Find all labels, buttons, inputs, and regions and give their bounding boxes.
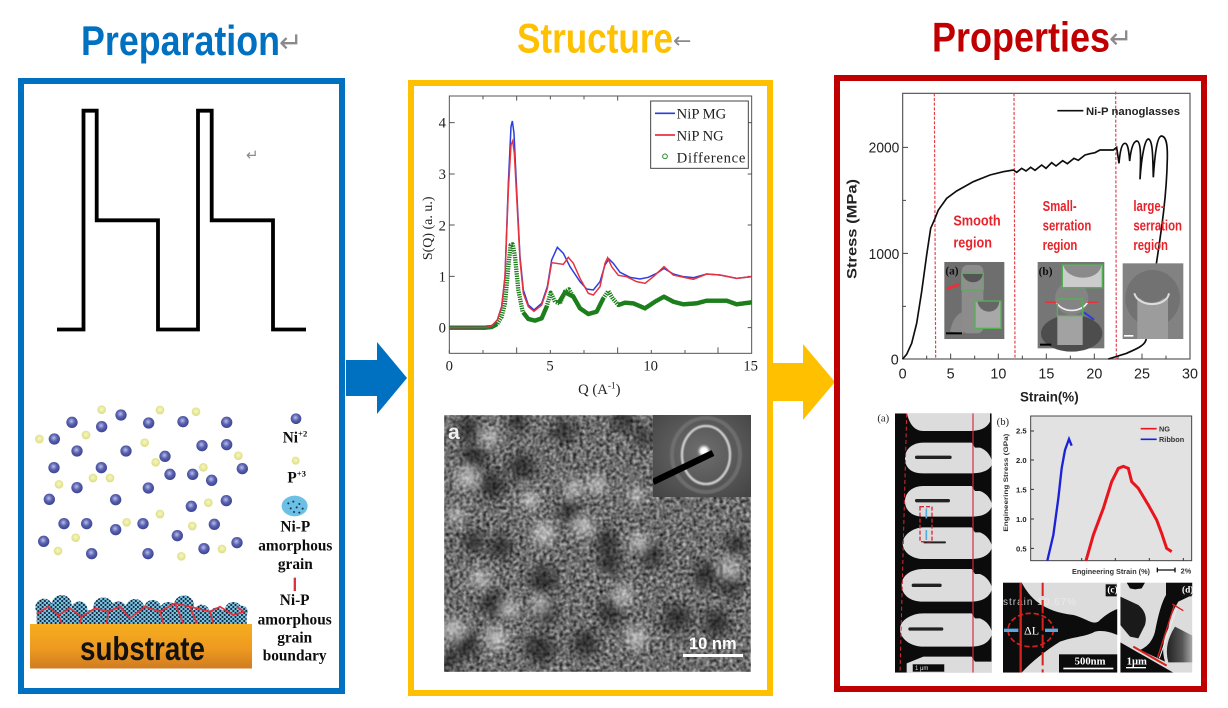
SEM inset b <box>1038 262 1104 352</box>
NG vs ribbon stress chart: NG <box>1159 424 1170 433</box>
stress-strain chart: 0 <box>891 352 899 368</box>
TEM micrograph <box>441 409 751 672</box>
TEM image d: 1μm <box>1127 656 1147 667</box>
legend: Ni-P <box>280 592 310 609</box>
region labels: region <box>1133 238 1168 254</box>
title: Properties: Properties <box>932 14 1110 60</box>
S(Q) line chart: Q (A <box>578 382 608 398</box>
S(Q) line chart: -1 <box>608 382 616 392</box>
S(Q) line chart: 2 <box>439 218 446 234</box>
legend: +2 <box>298 428 307 438</box>
atoms diagram <box>35 405 248 561</box>
substrate block <box>30 624 252 668</box>
in-situ TEM strip <box>895 412 992 673</box>
stray return mark: ↵ <box>246 146 259 164</box>
NG vs ribbon stress chart <box>1003 416 1192 576</box>
NG vs ribbon stress chart: 2.5 <box>1016 427 1027 436</box>
NG vs ribbon stress chart: 1.5 <box>1016 485 1027 494</box>
NG vs ribbon stress chart: 1.0 <box>1016 515 1027 524</box>
in-situ TEM strip: 1 μm <box>915 666 928 672</box>
legend: +3 <box>297 469 307 479</box>
arrow: structure to properties <box>772 344 835 420</box>
panel letter a: a <box>448 421 460 444</box>
SEM inset a: (a) <box>945 265 959 277</box>
SEM inset c <box>1123 263 1183 339</box>
arrow: preparation to structure <box>346 342 407 414</box>
scale bar 10 nm <box>683 635 743 657</box>
region labels: Small- <box>1043 199 1077 215</box>
S(Q) line chart: 3 <box>439 167 446 183</box>
NG vs ribbon stress chart: Engineering Stress (GPa) <box>1003 434 1010 532</box>
stress-strain chart: 25 <box>1134 366 1150 382</box>
NG vs ribbon stress chart: 0.5 <box>1016 544 1027 553</box>
bottom figures <box>877 412 1193 673</box>
chart legend: NiP MG <box>677 107 727 123</box>
stress-strain chart: 2000 <box>869 141 899 157</box>
title: Properties: ↵ <box>1109 22 1132 55</box>
SEM inset b: (b) <box>1039 266 1053 278</box>
chart legend: Difference <box>677 150 745 166</box>
title: Preparation: ↵ <box>279 26 302 59</box>
region labels: region <box>953 235 992 251</box>
S(Q) line chart: 4 <box>439 116 447 132</box>
difference curve <box>449 244 752 328</box>
TEM image c: 500nm <box>1075 656 1106 667</box>
MG curve <box>449 121 752 328</box>
label a: (a) <box>877 414 890 425</box>
panel: properties <box>837 78 1204 689</box>
curve legend: Ni-P nanoglasses <box>1086 106 1180 118</box>
substrate block: substrate <box>80 630 205 667</box>
region labels: serration <box>1133 219 1182 235</box>
chart legend <box>651 101 748 168</box>
stress-strain chart: 1000 <box>869 247 899 263</box>
legend: P <box>287 470 297 487</box>
scale bar 10 nm: 10 nm <box>689 635 737 653</box>
S(Q) line chart: 0 <box>439 321 446 337</box>
stress-strain chart: 10 <box>990 366 1006 382</box>
TEM image d: (d) <box>1182 585 1193 596</box>
stress-strain chart: 0 <box>899 366 907 382</box>
S(Q) line chart <box>421 96 758 398</box>
S(Q) line chart: 1 <box>439 270 446 286</box>
region labels: serration <box>1043 219 1091 235</box>
diffraction inset <box>653 415 751 497</box>
S(Q) line chart: 5 <box>546 359 554 375</box>
title: Structure: ← <box>673 29 691 54</box>
NG vs ribbon stress chart: 2% <box>1181 566 1192 575</box>
region labels: region <box>1043 238 1077 254</box>
stress-strain chart: 15 <box>1038 366 1054 382</box>
pulse waveform chart <box>57 111 306 330</box>
stress curve <box>903 136 1167 359</box>
legend <box>258 413 332 665</box>
TEM image c: (c) <box>1107 585 1118 596</box>
TEM image c: ΔL <box>1024 623 1039 637</box>
stress-strain chart: 5 <box>947 366 955 382</box>
S(Q) line chart: S(Q) (a. u.) <box>421 196 436 260</box>
S(Q) line chart: ) <box>616 382 621 398</box>
NG curve <box>449 141 752 328</box>
title: Preparation: Preparation <box>81 17 280 64</box>
TEM image c: strain 10.67% <box>1003 597 1077 608</box>
S(Q) line chart: 0 <box>446 359 453 375</box>
panel: structure <box>411 83 770 693</box>
chart legend: NiP NG <box>677 128 724 144</box>
legend: grain <box>278 556 313 573</box>
NG vs ribbon stress chart: Engineering Strain (%) <box>1072 567 1151 576</box>
region labels <box>953 199 1182 254</box>
legend: amorphous <box>258 538 332 555</box>
title: Structure: Structure <box>517 14 673 62</box>
S(Q) line chart: 15 <box>743 359 758 375</box>
TEM image d <box>1120 583 1193 673</box>
region labels: Smooth <box>953 214 1001 230</box>
stress-strain chart: Strain(%) <box>1020 389 1079 405</box>
NG vs ribbon stress chart: 2.0 <box>1016 456 1027 465</box>
legend: grain <box>277 630 313 647</box>
panel: preparation <box>21 81 342 691</box>
deposited grains with boundaries <box>35 595 248 625</box>
label b: (b) <box>997 417 1010 428</box>
region labels: large- <box>1133 199 1165 215</box>
legend: boundary <box>263 648 327 665</box>
legend: Ni-P <box>280 518 310 535</box>
NG vs ribbon stress chart: Ribbon <box>1159 435 1185 444</box>
legend: Ni <box>283 429 298 446</box>
region dividers <box>934 92 1116 359</box>
stress-strain chart <box>844 92 1198 405</box>
SEM inset a <box>944 262 1004 339</box>
legend: amorphous <box>258 611 332 628</box>
TEM image c <box>1003 583 1118 673</box>
stress-strain chart: 20 <box>1086 366 1102 382</box>
stress-strain chart: 30 <box>1182 366 1198 382</box>
stress-strain chart: Stress (MPa) <box>844 179 860 279</box>
S(Q) line chart: 10 <box>643 359 658 375</box>
